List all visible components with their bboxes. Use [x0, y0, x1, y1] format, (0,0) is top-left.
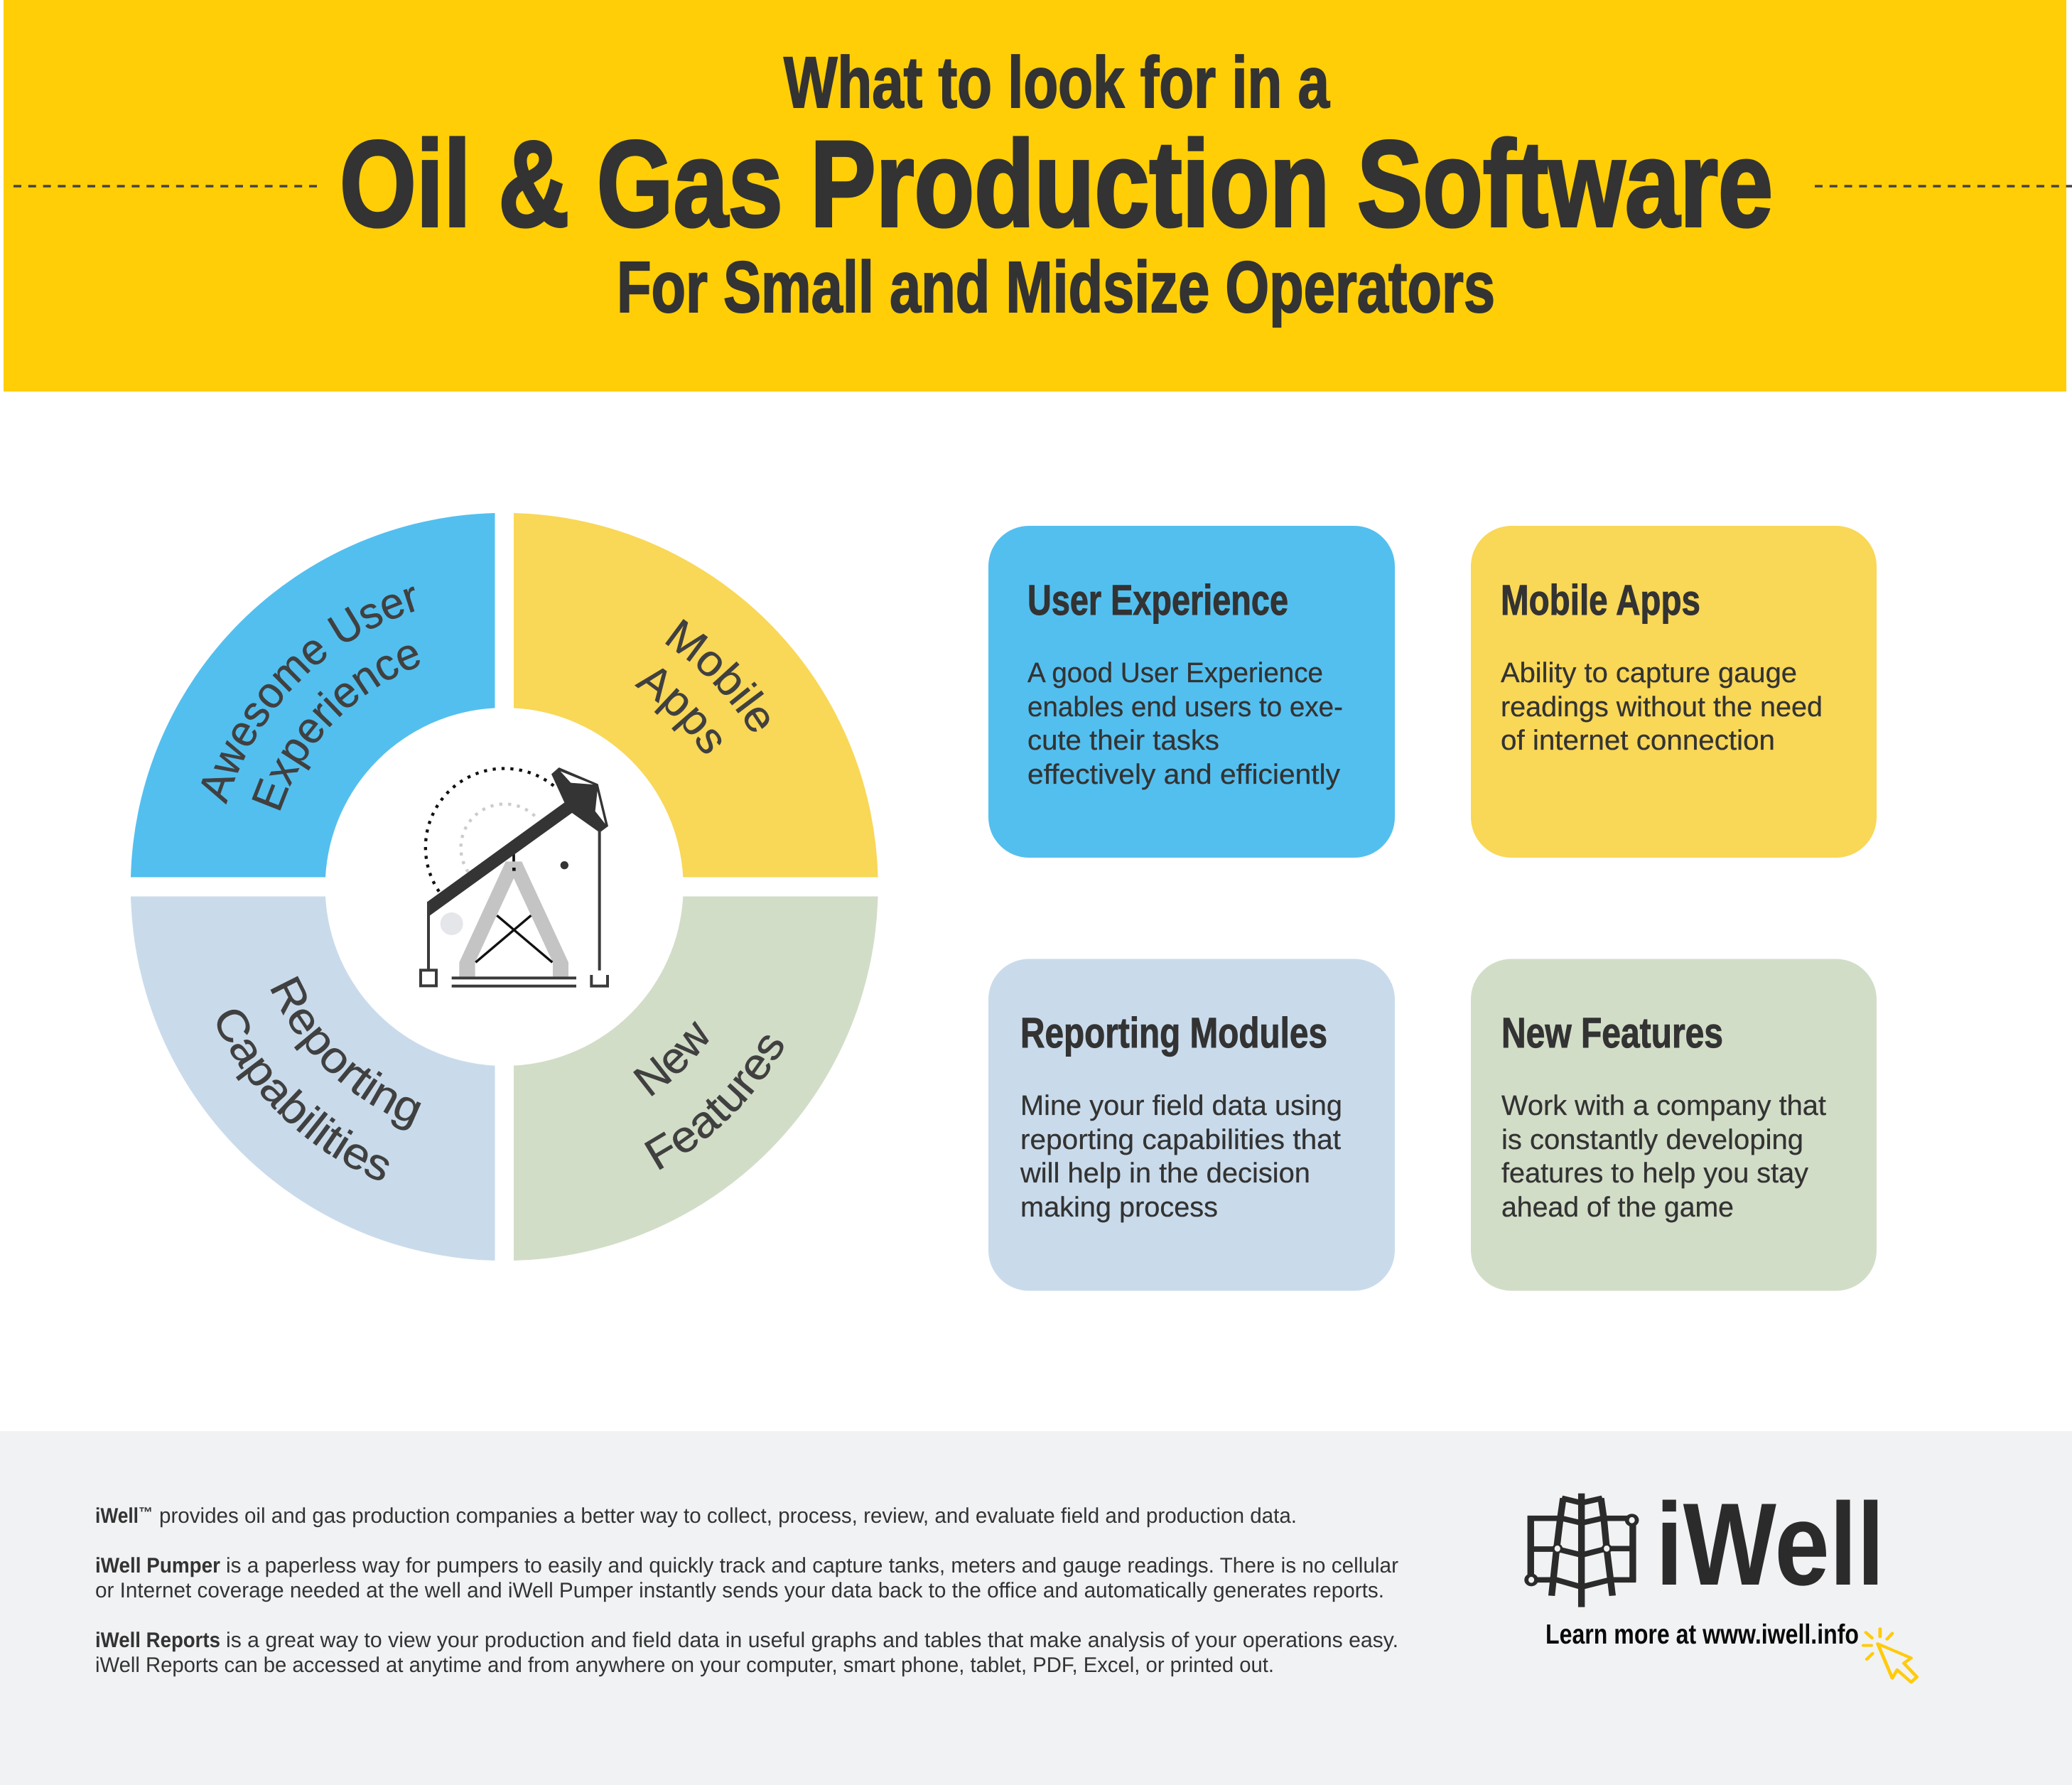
- card: user experience: cute their tasks: [1027, 725, 1219, 756]
- logo: iWell wordmark: iWell: [1656, 1479, 1884, 1609]
- footer panel: [0, 1431, 2072, 1785]
- footer text: iWell Reports: [95, 1629, 1398, 1677]
- card: user experience: A good User Experience: [1027, 657, 1323, 689]
- card: new features: is constantly developing: [1501, 1124, 1803, 1155]
- card: mobile apps: of internet connection: [1501, 725, 1775, 756]
- card: mobile apps: readings without the need: [1501, 691, 1823, 723]
- card: new features: ahead of the game: [1501, 1192, 1734, 1223]
- card: mobile apps: [1471, 526, 1877, 858]
- card: new features: [1471, 959, 1877, 1290]
- card: reporting modules: making process: [1020, 1192, 1218, 1223]
- card: new features: New Features: [1501, 1009, 1723, 1057]
- title: [340, 42, 1773, 328]
- footer text: iWell Reports: iWell Reports can be accessed at anytime and from anywhere on your computer, smart phone, tablet, PDF, Excel, or printed out.: [95, 1654, 1274, 1677]
- card: reporting modules: Reporting Modules: [1020, 1009, 1327, 1057]
- card: mobile apps: Ability to capture gauge: [1501, 657, 1797, 689]
- wheel segment: awesome user experience: [131, 513, 495, 877]
- card: reporting modules: will help in the decision: [1020, 1158, 1310, 1189]
- icon: oil pumpjack: [421, 767, 608, 988]
- footer text: about iWell: ™: [139, 1505, 153, 1521]
- card: user experience: enables end users to exe-: [1027, 691, 1343, 723]
- call to action link: Learn more at www.iwell.info: [1545, 1619, 1859, 1650]
- header banner: [4, 0, 2072, 392]
- wheel segment: new features: [514, 897, 878, 1261]
- wheel segment: mobile apps: Apps: [635, 668, 722, 753]
- title: For Small and Midsize Operators: [617, 247, 1495, 328]
- icon: yellow cursor click: [1863, 1629, 1917, 1682]
- footer text: about iWell: provides oil and gas production companies a better way to collect, process, review, and evaluate field and production data.: [159, 1504, 1297, 1528]
- logo: iWell grid icon: [1526, 1494, 1637, 1607]
- wheel segment: reporting capabilities: [131, 897, 495, 1261]
- card: user experience: User Experience: [1027, 576, 1288, 624]
- card: reporting modules: Mine your field data using: [1020, 1090, 1342, 1121]
- footer text: iWell Pumper: is a paperless way for pumpers to easily and quickly track and capture tanks, meters and gauge readings. There is no cellular: [226, 1554, 1398, 1578]
- card: user experience: [988, 526, 1395, 858]
- card: new features: features to help you stay: [1501, 1158, 1808, 1189]
- title: Oil & Gas Production Software: [340, 116, 1773, 252]
- card: reporting modules: reporting capabilities that: [1020, 1124, 1341, 1155]
- footer text: about iWell: iWell: [95, 1504, 139, 1528]
- wheel segment: reporting capabilities: Capabilities: [217, 1009, 389, 1180]
- footer text: iWell Reports: iWell Reports: [95, 1629, 220, 1652]
- title: What to look for in a: [784, 42, 1330, 123]
- footer text: iWell Reports: is a great way to view your production and field data in useful graphs and tables that make analysis of your operations easy.: [226, 1629, 1398, 1652]
- footer text: iWell Pumper: or Internet coverage needed at the well and iWell Pumper instantly sends your data back to the office and automatically generates reports.: [95, 1579, 1384, 1602]
- wheel segment: mobile apps: [514, 513, 878, 877]
- card: mobile apps: Mobile Apps: [1501, 576, 1700, 624]
- card: reporting modules: [988, 959, 1395, 1290]
- wheel segment: reporting capabilities: Reporting: [270, 976, 421, 1131]
- wheel diagram: [131, 513, 878, 1261]
- card: new features: Work with a company that: [1501, 1090, 1826, 1121]
- wheel segment: new features: New: [633, 1020, 709, 1096]
- wheel segment: awesome user experience: Experience: [252, 645, 420, 811]
- wheel segment: mobile apps: Mobile: [665, 619, 769, 732]
- footer text: iWell Pumper: [95, 1554, 1398, 1602]
- wheel segment: awesome user experience: Awesome User: [201, 587, 415, 804]
- card: user experience: effectively and efficiently: [1027, 759, 1340, 790]
- wheel segment: new features: Features: [644, 1035, 783, 1170]
- footer text: iWell Pumper: iWell Pumper: [95, 1554, 220, 1578]
